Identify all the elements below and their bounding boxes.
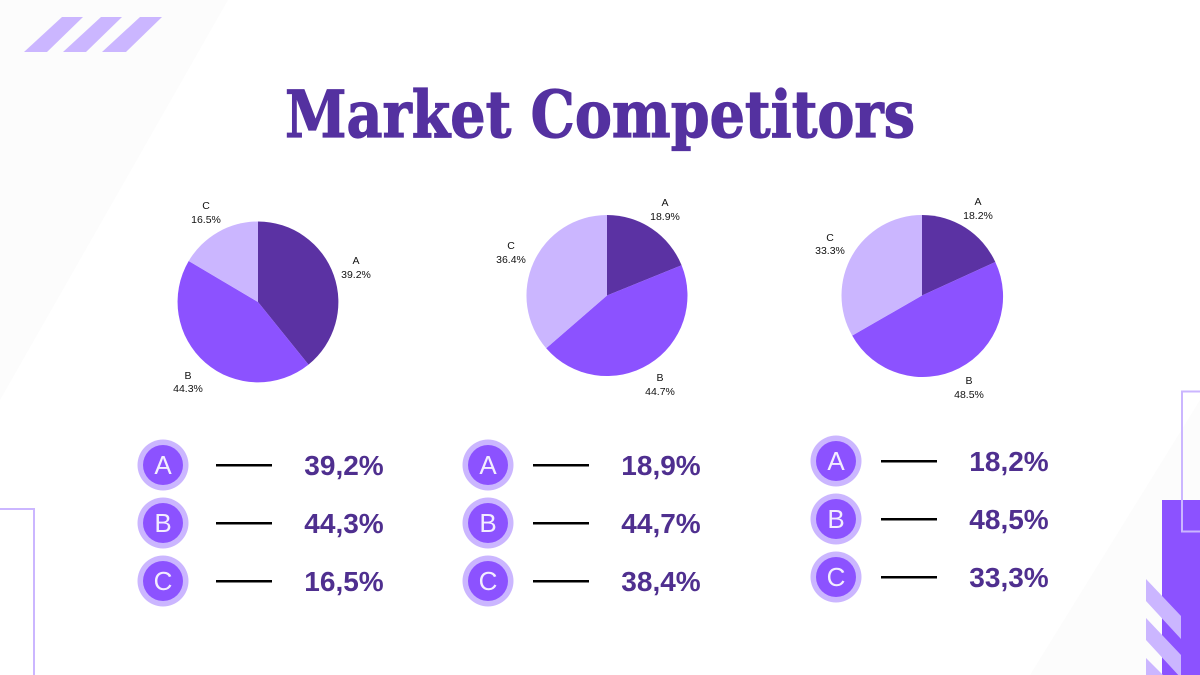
pie chart 1: A (352, 255, 360, 267)
pie chart 2: B (656, 372, 664, 384)
pie chart 3: C (826, 232, 834, 244)
legend column 1 (138, 440, 384, 606)
legend row: A 18,9%: A (479, 450, 497, 480)
legend row: C 16,5%: C (154, 566, 172, 596)
pie chart 1: B (184, 370, 192, 382)
legend row: A 39,2%: A (154, 450, 172, 480)
legend row: B 44,7%: B (479, 508, 497, 538)
pie chart 1 (173, 200, 371, 395)
pie chart 3: 33.3% (815, 245, 845, 257)
legend column 2 (462, 440, 701, 606)
legend row: C 33,3%: C (827, 562, 845, 592)
legend row: B 48,5%: 48,5% (969, 504, 1049, 535)
legend row: C 16,5% (138, 556, 384, 606)
legend row: C 33,3%: 33,3% (969, 562, 1049, 593)
pie chart 1: 16.5% (191, 214, 221, 226)
pie chart 1: 39.2% (341, 269, 371, 281)
background shape: top left (0, 0, 228, 400)
background shape: bottom right (1030, 400, 1200, 675)
legend row: C 16,5%: 16,5% (304, 566, 384, 597)
legend row: B 48,5% (810, 494, 1049, 544)
pie chart 3: B (965, 375, 973, 387)
decoration: right outline (1182, 392, 1200, 532)
legend row: B 44,3% (138, 498, 384, 548)
pie chart 2: C (507, 240, 515, 252)
decoration: bottom right stripes (1146, 579, 1181, 675)
decoration: bottom left outline (0, 509, 34, 675)
legend row: A 39,2%: 39,2% (304, 450, 384, 481)
legend row: B 48,5%: B (827, 504, 845, 534)
pie chart 3: 18.2% (963, 210, 993, 222)
legend row: A 18,9% (462, 440, 701, 490)
legend row: C 33,3% (810, 552, 1049, 602)
decoration: right purple block (1162, 500, 1200, 675)
pie chart 2: 18.9% (650, 211, 680, 223)
legend row: C 38,4%: C (479, 566, 497, 596)
legend row: A 39,2% (138, 440, 384, 490)
pie chart 2 (496, 197, 687, 398)
decoration: top left stripes (24, 17, 162, 52)
pie chart 1: C (202, 200, 210, 212)
legend row: C 38,4%: 38,4% (621, 566, 701, 597)
pie chart 2: A (661, 197, 669, 209)
legend row: B 44,7% (462, 498, 701, 548)
pie chart 3: 48.5% (954, 389, 984, 401)
pie chart 2: 44.7% (645, 386, 675, 398)
legend row: A 18,2%: A (827, 446, 845, 476)
legend row: C 38,4% (462, 556, 701, 606)
pie chart 3 (815, 196, 1003, 401)
legend row: A 18,2% (810, 436, 1049, 486)
pie chart 3: A (974, 196, 982, 208)
legend row: A 18,2%: 18,2% (969, 446, 1049, 477)
legend row: B 44,3%: B (154, 508, 172, 538)
pie chart 1: 44.3% (173, 383, 203, 395)
legend row: A 18,9%: 18,9% (621, 450, 701, 481)
title: Market Competitors (285, 77, 915, 153)
pie chart 2: 36.4% (496, 254, 526, 266)
legend column 3 (810, 436, 1049, 602)
legend row: B 44,7%: 44,7% (621, 508, 701, 539)
legend row: B 44,3%: 44,3% (304, 508, 384, 539)
